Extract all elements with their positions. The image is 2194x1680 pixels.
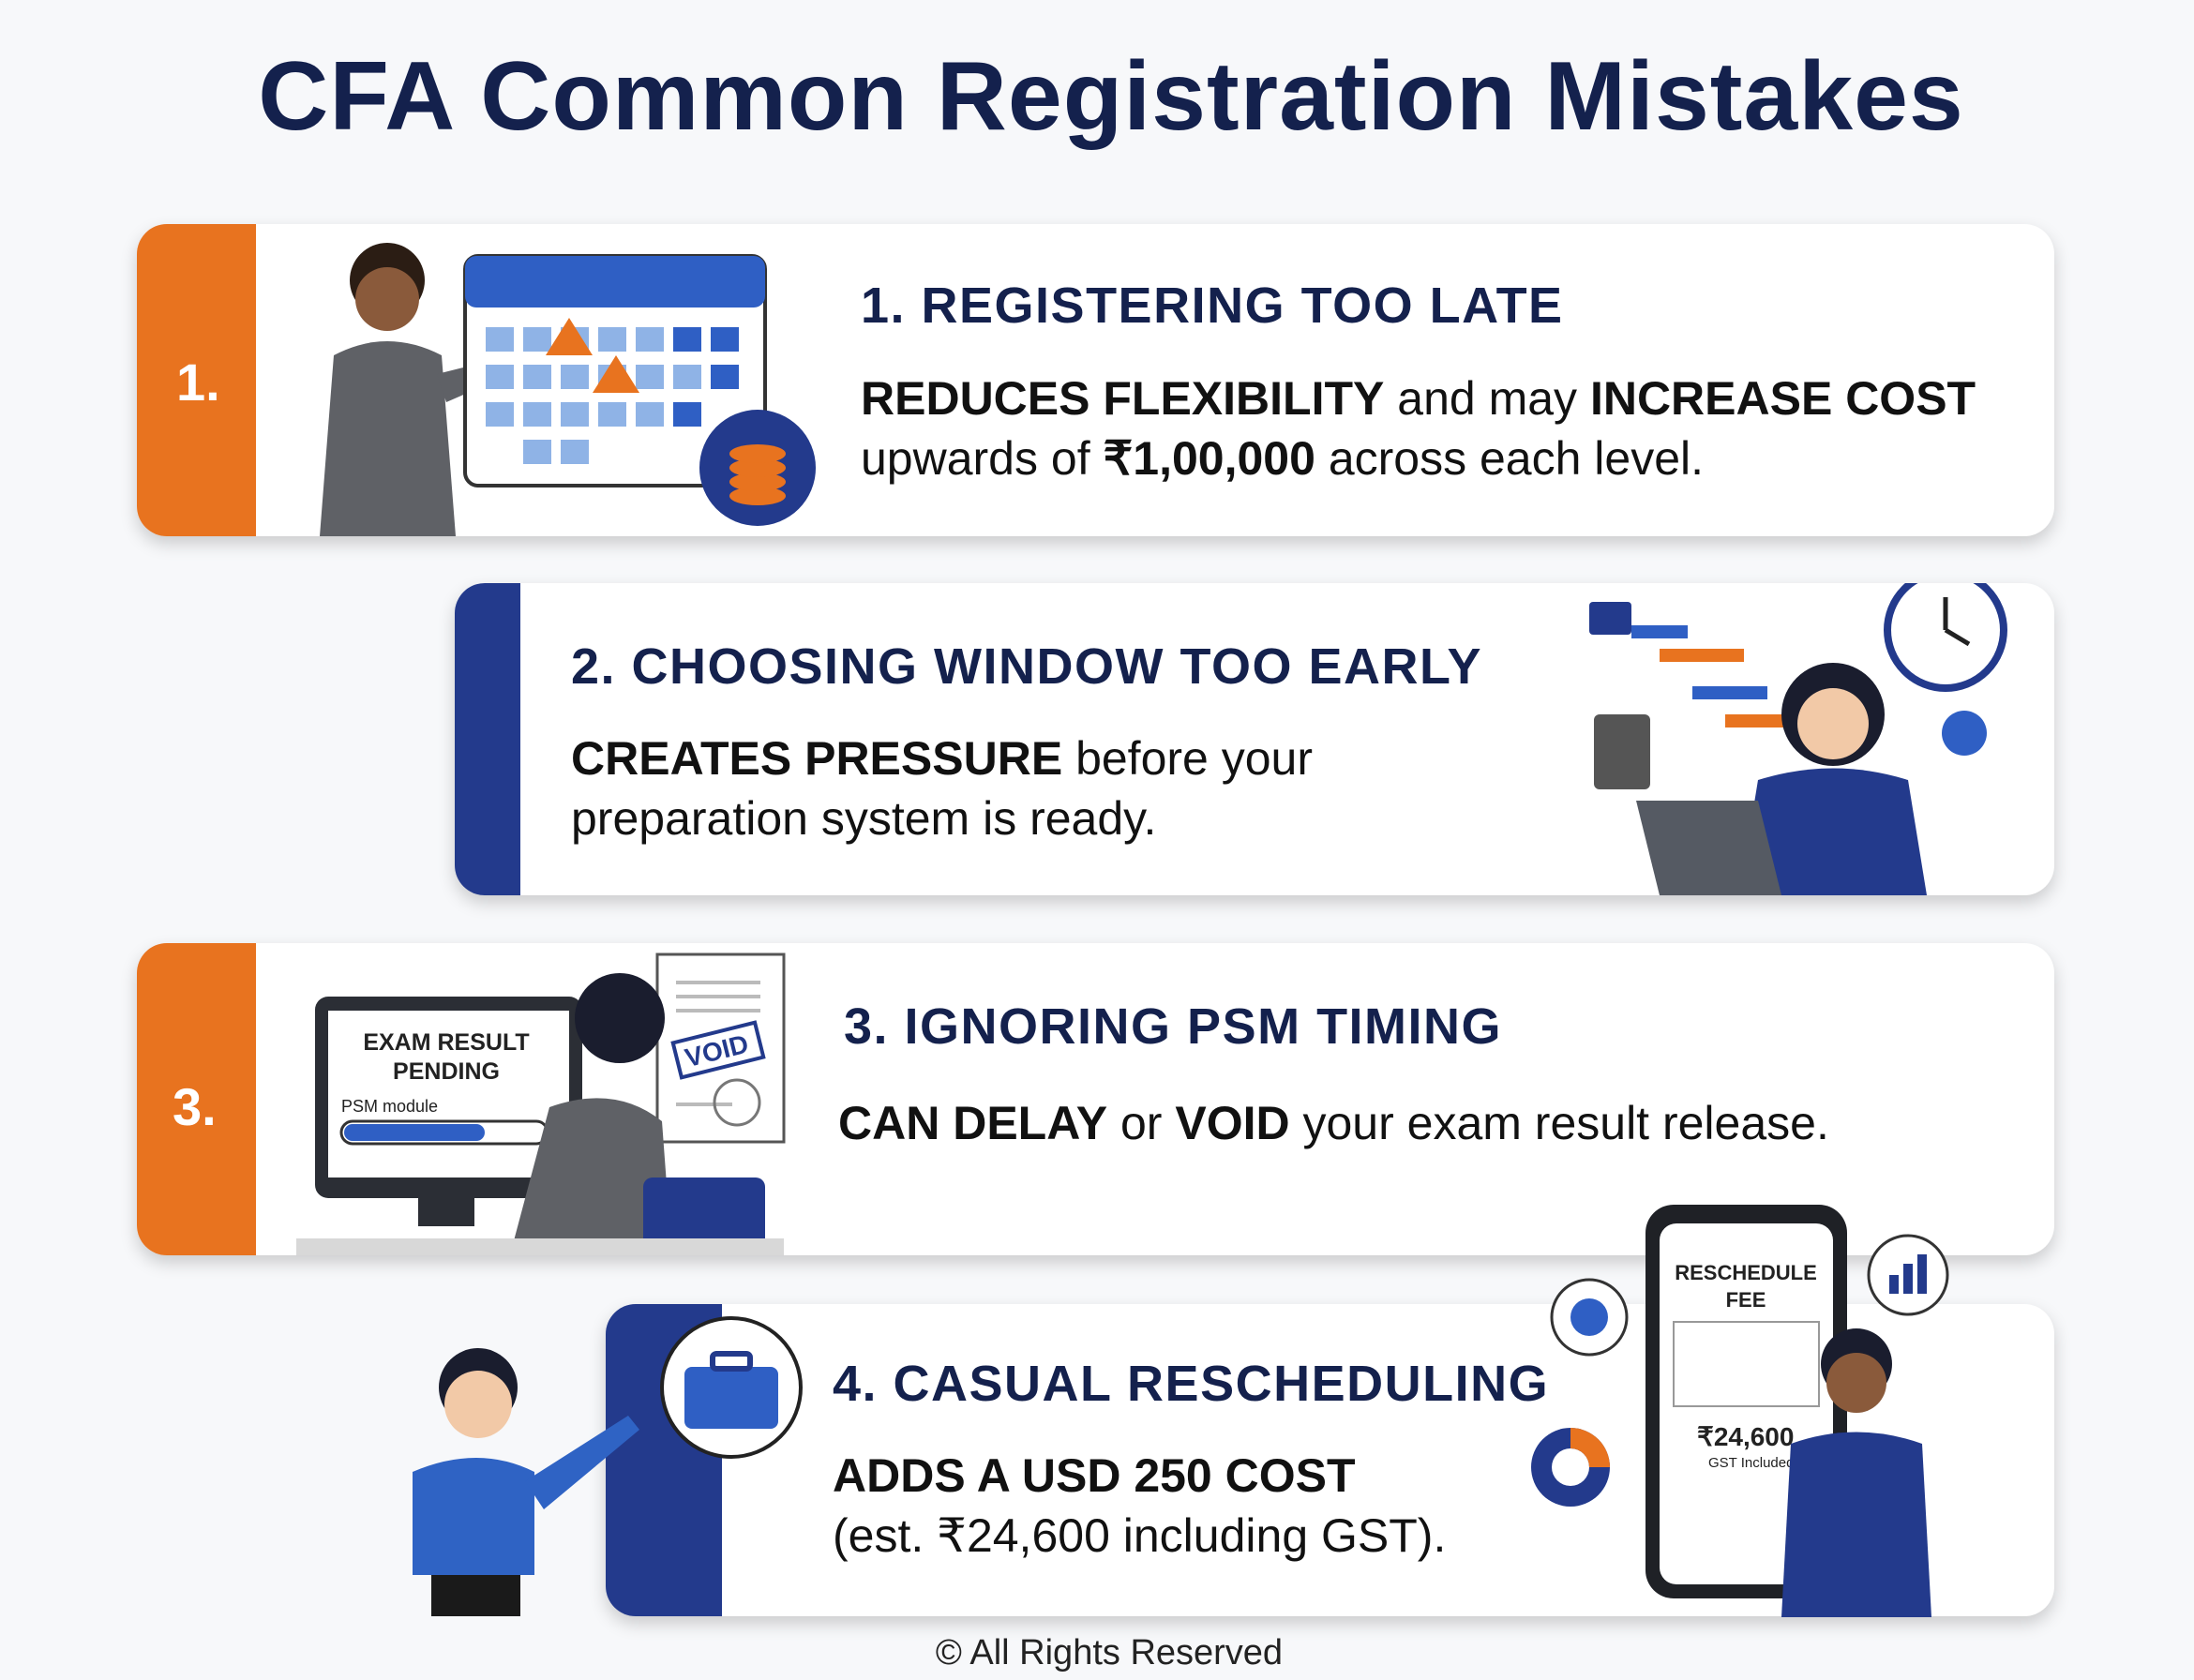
heading 3: 3. IGNORING PSM TIMING bbox=[844, 998, 1502, 1055]
illustration: phone reschedule fee with man: ₹24,600 bbox=[1697, 1422, 1794, 1451]
heading 1: 1. REGISTERING TOO LATE bbox=[861, 278, 1564, 334]
footer: © All Rights Reserved bbox=[936, 1633, 1283, 1672]
illustration: person at computer with void document: VOID bbox=[682, 1029, 751, 1072]
text 1: upwards of ₹1,00,000 across each level. bbox=[861, 432, 1704, 485]
illustration: phone reschedule fee with man: GST Included bbox=[1708, 1455, 1794, 1471]
panel: mistake 3 bbox=[137, 943, 2054, 1255]
text 4: ADDS A USD 250 COST bbox=[833, 1449, 1356, 1502]
illustration: person at computer with void document: PENDING bbox=[393, 1058, 500, 1085]
text 1 bbox=[861, 372, 1976, 485]
text 4 bbox=[833, 1449, 1446, 1562]
illustration: person with calendar bbox=[320, 243, 816, 536]
text 1: REDUCES FLEXIBILITY and may INCREASE COST bbox=[861, 372, 1976, 425]
heading 2: 2. CHOOSING WINDOW TOO EARLY bbox=[571, 638, 1482, 695]
text 2: preparation system is ready. bbox=[571, 792, 1156, 845]
panel: mistake 1 bbox=[137, 224, 2054, 536]
illustration: phone reschedule fee with man: FEE bbox=[1726, 1288, 1766, 1312]
illustration: person at computer with void document: EXAM RESULT bbox=[363, 1029, 530, 1056]
text 2 bbox=[571, 732, 1313, 845]
text 4: (est. ₹24,600 including GST). bbox=[833, 1509, 1446, 1562]
illustration: phone reschedule fee with man bbox=[1531, 1205, 1948, 1617]
text 2: CREATES PRESSURE before your bbox=[571, 732, 1313, 785]
number 3: 3. bbox=[173, 1077, 217, 1136]
heading 4: 4. CASUAL RESCHEDULING bbox=[833, 1356, 1549, 1412]
illustration: person at computer with void document bbox=[296, 952, 786, 1255]
number 1: 1. bbox=[176, 352, 220, 412]
icon: briefcase bubble bbox=[660, 1316, 803, 1459]
title: CFA Common Registration Mistakes bbox=[258, 42, 1964, 151]
text 3: CAN DELAY or VOID your exam result release. bbox=[838, 1097, 1829, 1149]
illustration: phone reschedule fee with man: RESCHEDULE bbox=[1675, 1261, 1817, 1284]
illustration: man pointing bbox=[413, 1348, 639, 1616]
panel: mistake 4 bbox=[606, 1304, 2054, 1616]
illustration: person at computer with void document: PSM module bbox=[341, 1097, 438, 1116]
illustration: stressed woman with laptop and clock bbox=[1589, 583, 2007, 895]
panel: mistake 2 bbox=[455, 583, 2054, 895]
